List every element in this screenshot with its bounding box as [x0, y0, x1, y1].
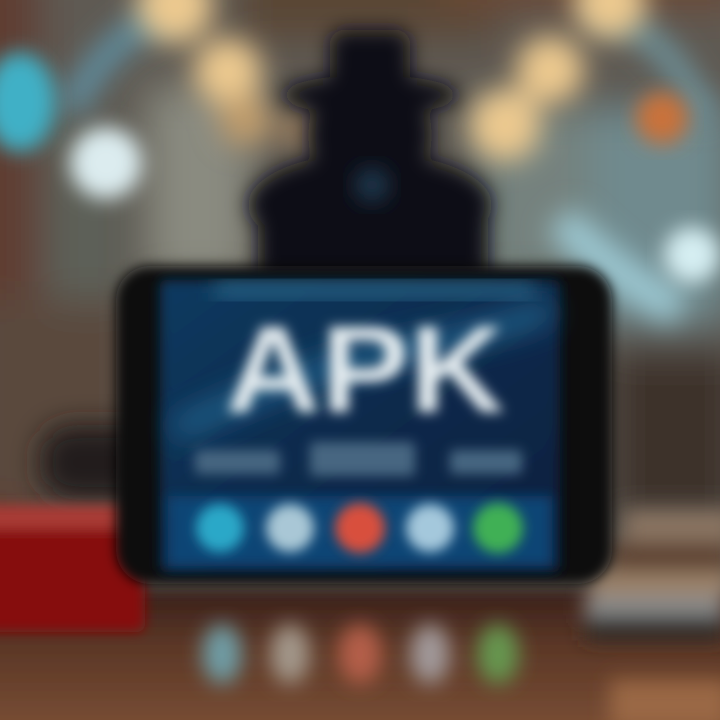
warm lamps — [137, 0, 646, 161]
button bar — [168, 496, 552, 566]
warm and cool lights — [0, 0, 720, 283]
caption blocks — [195, 442, 522, 476]
arcs of light — [70, 10, 705, 310]
top bar glow — [215, 283, 535, 297]
books right — [585, 510, 720, 720]
light: orange orb — [636, 92, 688, 144]
figure centre glow — [354, 167, 390, 203]
APK title: APK — [225, 301, 505, 439]
phone screen — [160, 280, 560, 572]
table — [0, 590, 720, 720]
light: cyan orb — [0, 52, 56, 152]
table shadow left — [40, 425, 180, 500]
light: white orb — [70, 127, 142, 199]
screen glow streak — [175, 310, 550, 430]
button reflections on table — [202, 624, 519, 684]
app buttons — [196, 503, 523, 553]
light: pale blue orb — [664, 227, 720, 283]
red box — [0, 505, 145, 632]
phone — [116, 266, 612, 584]
phone body — [116, 266, 612, 584]
silhouette figure with hat — [248, 30, 492, 280]
